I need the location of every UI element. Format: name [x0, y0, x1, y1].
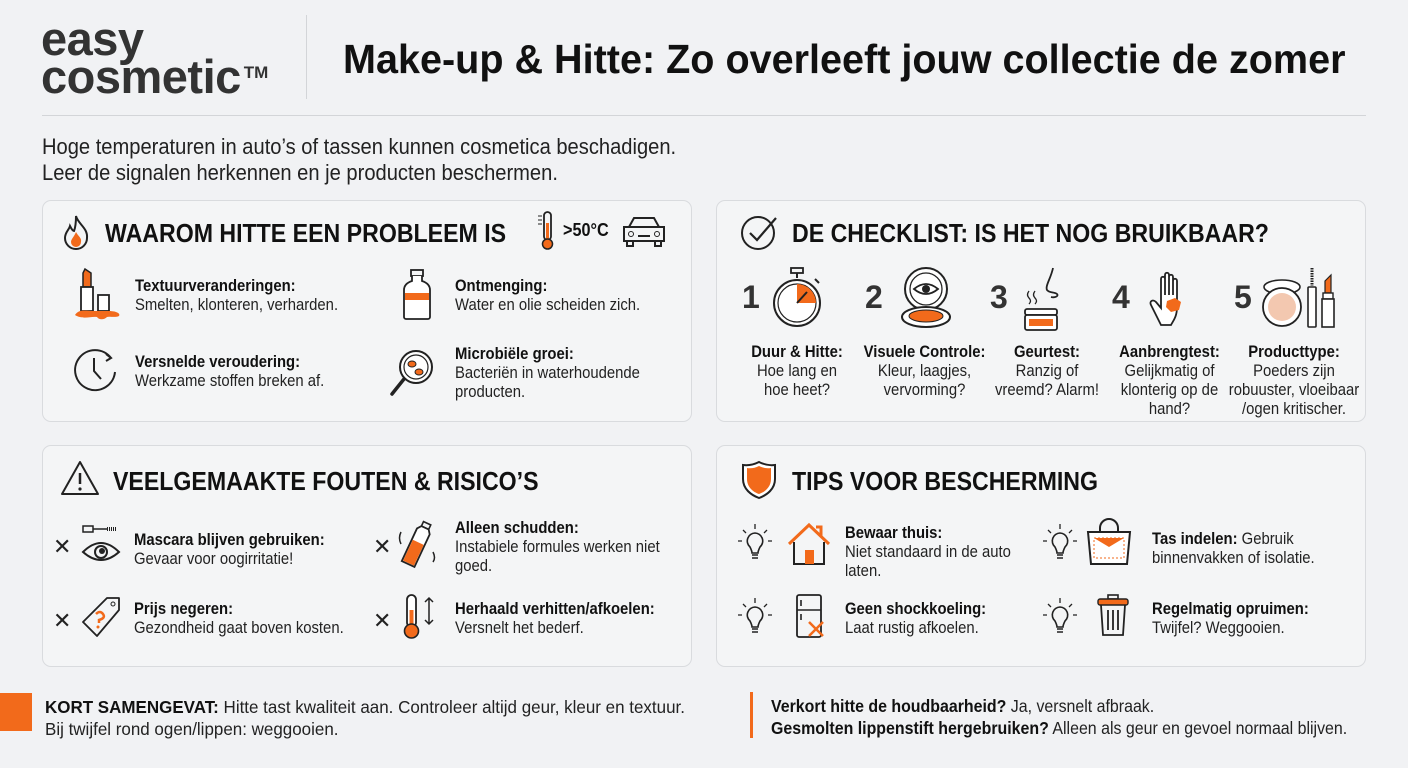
step 4: hand? [1149, 400, 1190, 418]
intro text: Leer de signalen herkennen en je producten beschermen. [42, 160, 558, 185]
icon: price tag [82, 597, 120, 637]
panel: waarom hitte [42, 200, 692, 422]
icon: warning triangle [61, 461, 99, 495]
step 2: vervorming? [884, 381, 965, 399]
heading: VEELGEMAAKTE FOUTEN & RISICO’S [113, 466, 539, 496]
item: ontmenging: Ontmenging: [455, 277, 547, 295]
step 4 [1112, 272, 1220, 418]
step 5: Producttype: [1248, 343, 1340, 361]
icon: shaking bottle [398, 520, 436, 568]
tip: tas indelen: binnenvakken of isolatie. [1152, 549, 1315, 567]
item: verhitten: Versnelt het bederf. [455, 619, 584, 637]
icon: shield [742, 460, 776, 500]
icon: magnifier bacteria [390, 350, 433, 396]
footer: FAQ [750, 690, 1390, 740]
footer: FAQ: Verkort hitte de houdbaarheid? Ja, versnelt afbraak. [771, 696, 1154, 716]
item: mascara: Mascara blijven gebruiken: [134, 531, 325, 549]
step 5: 5 [1234, 279, 1252, 315]
step 4: Gelijkmatig of [1125, 362, 1214, 380]
step 1: hoe heet? [764, 381, 830, 399]
item: textuur: Textuurveranderingen: [135, 277, 296, 295]
step 3: Geurtest: [1014, 343, 1080, 361]
step 4: 4 [1112, 279, 1130, 315]
item: prijs: Prijs negeren: [134, 600, 233, 618]
step 5 [1229, 268, 1359, 418]
panel: tips [716, 445, 1366, 667]
heading: TIPS VOOR BESCHERMING [792, 466, 1098, 496]
logo: cosmeticTM [41, 50, 268, 103]
icon: thermometer and car [538, 211, 665, 250]
item: schudden: goed. [455, 557, 492, 575]
item: schudden: Alleen schudden: [455, 519, 579, 537]
item: schudden: ✕ [373, 534, 391, 559]
item: prijs [53, 597, 344, 637]
step 5: Poeders zijn [1253, 362, 1335, 380]
icon: powder mascara lipstick [1262, 268, 1335, 328]
panel: fouten & risico's [42, 445, 692, 667]
item: microbiele groei [390, 345, 640, 401]
step 4: Aanbrengtest: [1119, 343, 1220, 361]
item: schudden: Instabiele formules werken niet [455, 538, 660, 556]
icon: thermometer arrows [404, 594, 434, 639]
step 2: Visuele Controle: [864, 343, 985, 361]
item: ontmenging [403, 269, 640, 320]
item: mascara: Gevaar voor oogirritatie! [134, 550, 293, 568]
item: veroudering [74, 349, 324, 392]
tip: regelmatig opruimen: Regelmatig opruimen: [1152, 600, 1309, 618]
item: veroudering: Versnelde veroudering: [135, 353, 300, 371]
footer: kort samengevat: KORT SAMENGEVAT: Hitte tast kwaliteit aan. Controleer altijd geur, kleur en textuur. [45, 697, 685, 717]
item: prijs: ✕ [53, 608, 71, 633]
tip: geen shockkoeling: Laat rustig afkoelen. [845, 619, 979, 637]
tip: geen shockkoeling [738, 594, 986, 638]
icon: bag [1086, 518, 1132, 565]
icon: compact mirror [901, 267, 951, 328]
footer: kort samengevat [0, 693, 700, 738]
logo: easy [41, 12, 144, 65]
icon: stopwatch [773, 267, 821, 327]
step 2: Kleur, laagjes, [878, 362, 971, 380]
step 3 [990, 268, 1099, 399]
tip: geen shockkoeling: Geen shockkoeling: [845, 600, 986, 618]
step 1 [742, 267, 843, 399]
icon: nose and jar [1024, 268, 1058, 331]
icon: hand [1150, 272, 1181, 326]
icon: fridge [796, 594, 824, 638]
item: textuur: Smelten, klonteren, verharden. [135, 296, 338, 314]
icon: check circle [741, 216, 777, 250]
icon: flame [64, 216, 88, 250]
icon: thermometer and car: >50°C [563, 220, 609, 240]
item: microbiele groei: producten. [455, 383, 525, 401]
step 2 [864, 267, 985, 399]
intro text [42, 134, 676, 185]
tip: regelmatig opruimen [1042, 598, 1362, 648]
step 1: Hoe lang en [757, 362, 837, 380]
step 2: 2 [865, 279, 883, 315]
item: mascara: ✕ [53, 534, 71, 559]
heading: WAAROM HITTE EEN PROBLEEM IS [105, 218, 506, 248]
icon: melting lipstick [75, 268, 120, 320]
icon: mascara eye [82, 525, 120, 561]
footer: FAQ: Gesmolten lippenstift hergebruiken? Alleen als geur en gevoel normaal blijven. [771, 718, 1347, 738]
heading: DE CHECKLIST: IS HET NOG BRUIKBAAR? [792, 218, 1269, 248]
item: prijs: Gezondheid gaat boven kosten. [134, 619, 344, 637]
item: textuur [75, 268, 338, 320]
tip: bewaar thuis: Niet standaard in de auto [845, 543, 1011, 561]
item: mascara [53, 525, 325, 568]
title: Make-up & Hitte: Zo overleeft jouw collectie de zomer [343, 36, 1345, 82]
tip: bewaar thuis [738, 523, 1011, 580]
tip: bewaar thuis: laten. [845, 562, 881, 580]
step 3: 3 [990, 279, 1008, 315]
item: verhitten: Herhaald verhitten/afkoelen: [455, 600, 655, 618]
step 5: /ogen kritischer. [1242, 400, 1346, 418]
item: microbiele groei: Microbiële groei: [455, 345, 574, 363]
item: verhitten: ✕ [373, 608, 391, 633]
step 3: Ranzig of [1016, 362, 1078, 380]
step 1: 1 [742, 279, 760, 315]
item: microbiele groei: Bacteriën in waterhoudende [455, 364, 640, 382]
step 5: robuuster, vloeibaar [1229, 381, 1359, 399]
step 1: Duur & Hitte: [751, 343, 843, 361]
footer: kort samengevat: Bij twijfel rond ogen/lippen: weggooien. [45, 719, 338, 739]
panel: checklist [716, 200, 1366, 422]
icon: bulb [738, 524, 772, 559]
intro text: Hoge temperaturen in auto’s of tassen kunnen cosmetica beschadigen. [42, 134, 676, 159]
item: veroudering: Werkzame stoffen breken af. [135, 372, 324, 390]
logo [41, 12, 268, 103]
step 4: klonterig op de [1121, 381, 1218, 399]
tip: tas indelen: Tas indelen: Gebruik [1152, 530, 1294, 548]
tip: bewaar thuis: Bewaar thuis: [845, 524, 942, 542]
tip: regelmatig opruimen: Twijfel? Weggooien. [1152, 619, 1285, 637]
step 3: vreemd? Alarm! [995, 381, 1099, 399]
icon: clock [74, 349, 116, 392]
item: ontmenging: Water en olie scheiden zich. [455, 296, 640, 314]
icon: bottle [403, 269, 431, 320]
item: schudden [373, 519, 660, 575]
item: verhitten [373, 594, 655, 639]
icon: trash bin [1096, 594, 1132, 636]
icon: house [788, 523, 830, 565]
tip: tas indelen [1043, 518, 1315, 567]
